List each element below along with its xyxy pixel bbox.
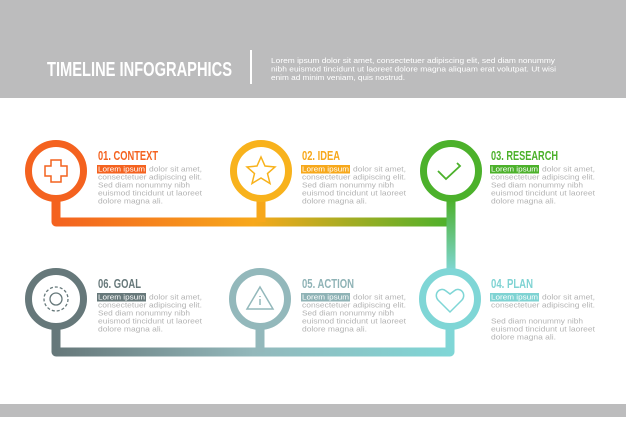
step 04: [490, 276, 596, 342]
step 03: 03. RESEARCH: [491, 148, 558, 163]
circle: idea: [234, 144, 288, 198]
step 02: consectetuer adipiscing elit.: [302, 172, 406, 182]
step 03: dolor sit amet,: [542, 164, 595, 174]
step 03: consectetuer adipiscing elit.: [491, 172, 595, 182]
step 06: dolore magna ali.: [98, 324, 163, 334]
step 02: dolor sit amet,: [353, 164, 406, 174]
circle: goal: [28, 272, 84, 326]
step 01: Sed diam nonummy nibh: [98, 180, 190, 190]
icon: gear: [44, 287, 68, 311]
step 04: consectetuer adipiscing elit.: [491, 300, 595, 310]
step 05: Lorem ipsum: [302, 292, 349, 302]
step 04: euismod tincidunt ut laoreet: [491, 324, 596, 334]
step 01: [97, 148, 203, 206]
header description: nibh euismod tincidunt ut laoreet dolore magna aliquam erat volutpat. Ut wisi: [271, 64, 556, 74]
circle: context: [28, 144, 84, 198]
step 01: dolore magna ali.: [98, 196, 163, 206]
step 04: Lorem ipsum: [491, 292, 538, 302]
step 01: 01. CONTEXT: [98, 148, 158, 163]
step 06: Lorem ipsum: [98, 292, 145, 302]
step 04: dolor sit amet,: [542, 292, 595, 302]
step 01: Lorem ipsum: [98, 164, 145, 174]
step 05: euismod tincidunt ut laoreet: [302, 316, 407, 326]
icon: check: [438, 163, 460, 179]
step 02: Lorem ipsum: [302, 164, 349, 174]
step 02: euismod tincidunt ut laoreet: [302, 188, 407, 198]
step 01: dolor sit amet,: [149, 164, 202, 174]
step 02: dolore magna ali.: [302, 196, 367, 206]
icon: cross: [45, 160, 67, 182]
step 05: dolor sit amet,: [353, 292, 406, 302]
icon: heart: [436, 289, 464, 312]
title: TIMELINE INFOGRAPHICS: [47, 59, 232, 81]
step 05: 05. ACTION: [302, 276, 354, 291]
step 04: dolore magna ali.: [491, 332, 556, 342]
step 02: Sed diam nonummy nibh: [302, 180, 394, 190]
step 03: Lorem ipsum: [491, 164, 538, 174]
circle: plan: [422, 272, 478, 326]
step 05: [301, 276, 407, 334]
step 03: euismod tincidunt ut laoreet: [491, 188, 596, 198]
step 03: [490, 148, 596, 206]
header banner: [0, 0, 626, 98]
footer strip: [0, 404, 626, 417]
icon: warning: [247, 287, 273, 309]
step 01: consectetuer adipiscing elit.: [98, 172, 202, 182]
connector lines: [56, 195, 451, 352]
step 06: consectetuer adipiscing elit.: [98, 300, 202, 310]
step 03: Sed diam nonummy nibh: [491, 180, 583, 190]
step 02: [301, 148, 407, 206]
circle: research: [424, 144, 478, 198]
step 03: dolore magna ali.: [491, 196, 556, 206]
step 04: 04. PLAN: [491, 276, 533, 291]
step 05: dolore magna ali.: [302, 324, 367, 334]
text blocks: [97, 148, 596, 342]
step 06: dolor sit amet,: [149, 292, 202, 302]
icon: star: [247, 157, 275, 184]
step 06: 06. GOAL: [98, 276, 141, 291]
step 04: Sed diam nonummy nibh: [491, 316, 583, 326]
step 05: Sed diam nonummy nibh: [302, 308, 394, 318]
circle: action: [232, 272, 288, 326]
step 06: [97, 276, 203, 334]
header description: Lorem ipsum dolor sit amet, consectetuer adipiscing elit, sed diam nonummy: [271, 56, 555, 65]
step 01: euismod tincidunt ut laoreet: [98, 188, 203, 198]
step 02: 02. IDEA: [302, 148, 340, 163]
header description: enim ad minim veniam, quis nostrud.: [271, 73, 405, 82]
step 06: Sed diam nonummy nibh: [98, 308, 190, 318]
step 05: consectetuer adipiscing elit.: [302, 300, 406, 310]
step 06: euismod tincidunt ut laoreet: [98, 316, 203, 326]
